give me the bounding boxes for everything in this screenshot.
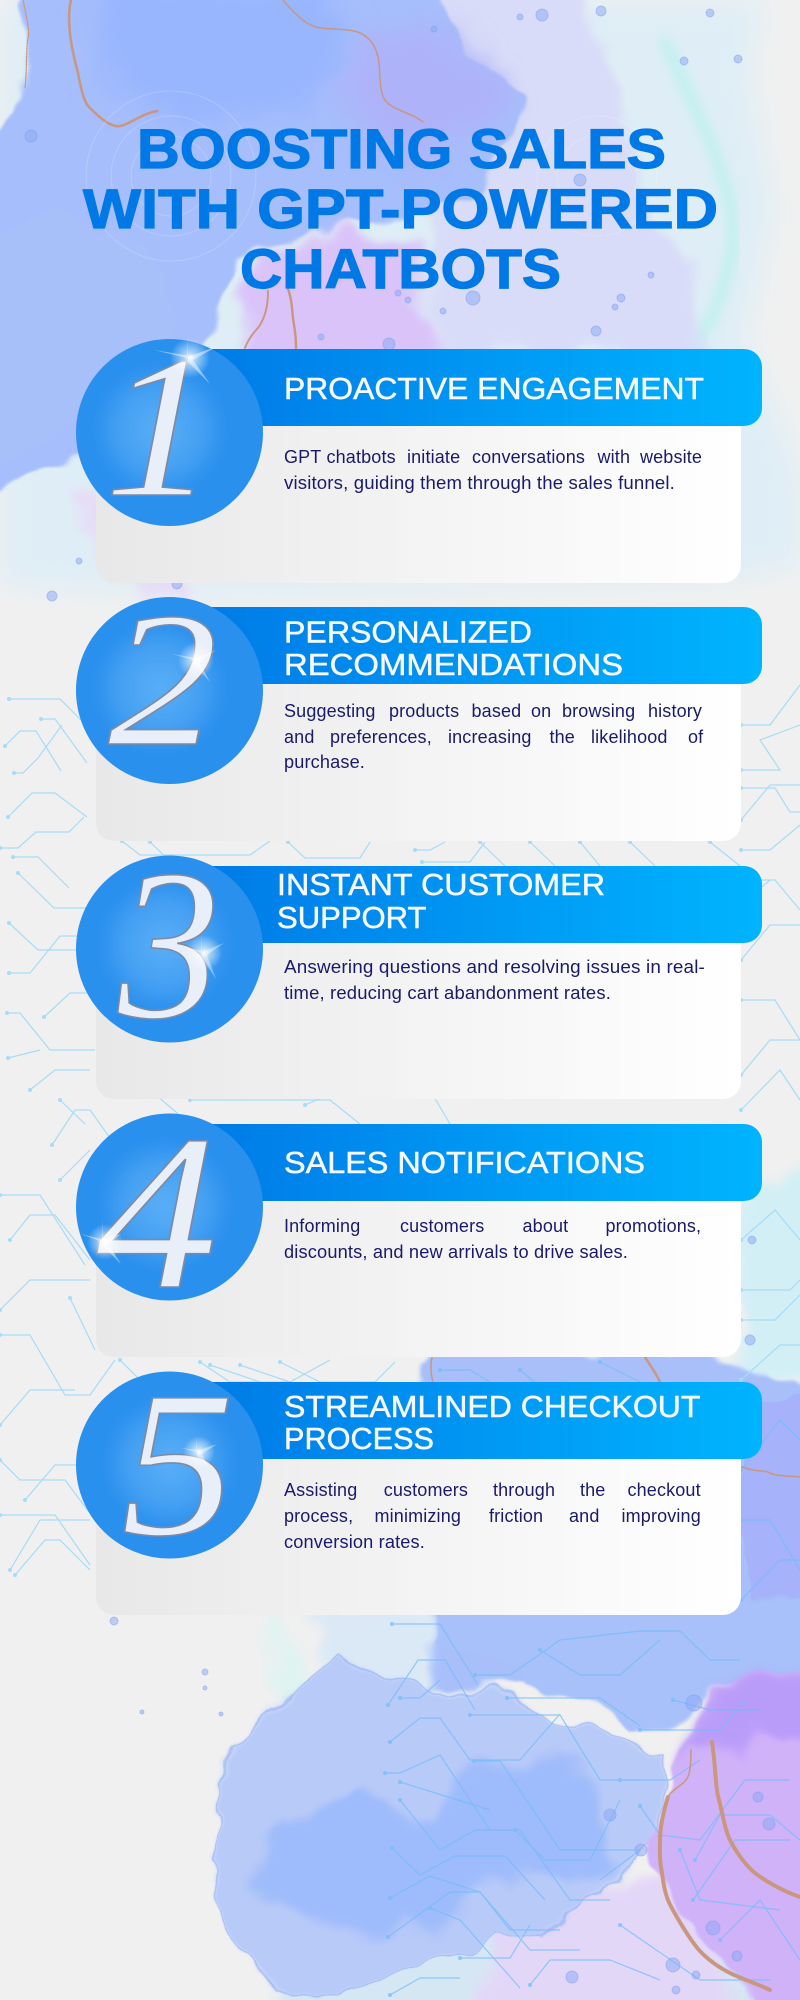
title: [83, 117, 718, 300]
heading 5: PROCESS: [284, 1421, 434, 1456]
body text 5: through: [493, 1480, 555, 1500]
header bar 2: [190, 607, 762, 684]
body text 1: chatbots: [326, 447, 396, 467]
header bar 3: [190, 866, 762, 943]
card body 2: [96, 658, 741, 841]
body text 4: customers: [400, 1216, 484, 1236]
body text 2: increasing: [448, 727, 532, 747]
number badge 5: 5: [121, 1349, 235, 1579]
card body 5: [96, 1432, 741, 1615]
number badge 2: [76, 573, 263, 786]
heading 1: PROACTIVE ENGAGEMENT: [284, 371, 704, 406]
body text 4: discounts, and new arrivals to drive sales.: [284, 1242, 628, 1262]
heading 5: STREAMLINED CHECKOUT: [284, 1389, 701, 1424]
body text 5: conversion rates.: [284, 1532, 425, 1552]
heading 2: [284, 614, 623, 682]
heading 2: PERSONALIZED: [284, 614, 532, 650]
body text 2: [284, 701, 704, 772]
circuit lines: [0, 685, 800, 1575]
panel: step 1 proactive engagement: [76, 314, 762, 583]
number badge 1: 1: [104, 314, 216, 539]
number badge 1: [76, 314, 263, 539]
body text 1: website: [639, 447, 702, 467]
body text 5: [284, 1480, 701, 1552]
card body 1: [96, 400, 741, 583]
body text 2: based: [472, 701, 521, 721]
title: CHATBOTS: [240, 237, 561, 300]
number badge 4: 4: [96, 1090, 218, 1336]
body text 2: products: [389, 701, 459, 721]
body text 5: customers: [384, 1480, 468, 1500]
number badge 3: [76, 825, 263, 1064]
lower right wash: [741, 1170, 800, 1380]
header bar 4: [190, 1124, 762, 1201]
card body 3: [96, 916, 741, 1099]
body text 5: checkout: [628, 1480, 701, 1500]
panel: step 4 sales notifications: [76, 1090, 762, 1357]
body text 5: improving: [622, 1506, 701, 1526]
body text 5: minimizing: [374, 1506, 461, 1526]
title: BOOSTING SALES: [137, 117, 666, 180]
body text 2: purchase.: [284, 752, 365, 772]
heading 4: SALES NOTIFICATIONS: [284, 1145, 645, 1180]
body text 2: likelihood: [591, 727, 668, 747]
body text 5: process,: [284, 1506, 353, 1526]
body text 4: Informing: [284, 1216, 360, 1236]
body text 2: preferences,: [330, 727, 432, 747]
body text 5: the: [580, 1480, 605, 1500]
bottom blobs: [300, 1600, 434, 1690]
number badge 5: [76, 1349, 263, 1579]
body text 1: [284, 447, 702, 493]
body text 2: of: [688, 727, 704, 747]
card body 4: [96, 1174, 741, 1357]
body text 1: GPT: [284, 447, 321, 467]
title: WITH GPT-POWERED: [83, 177, 718, 240]
body text 5: and: [569, 1506, 599, 1526]
body text 1: initiate: [407, 447, 460, 467]
body text 2: browsing: [562, 701, 635, 721]
body text 2: the: [550, 727, 575, 747]
heading 2: RECOMMENDATIONS: [284, 647, 623, 682]
body text 3: time, reducing cart abandonment rates.: [284, 983, 611, 1003]
body text 1: with: [596, 447, 630, 467]
number badge 4: [76, 1090, 263, 1336]
heading 3: INSTANT CUSTOMER: [277, 867, 605, 902]
number badge 3: 3: [117, 825, 220, 1064]
heading 3: [277, 867, 605, 935]
number badge 2: 2: [108, 573, 218, 786]
body text 3: Answering questions and resolving issues in real-: [284, 957, 705, 977]
body text 2: and: [284, 727, 314, 747]
header bar 1: [190, 349, 762, 426]
panel: step 3 instant customer support: [76, 825, 762, 1099]
body text 4: promotions,: [606, 1216, 701, 1236]
body text 5: friction: [489, 1506, 543, 1526]
panel: step 5 streamlined checkout process: [76, 1349, 762, 1615]
header bar 5: [190, 1382, 762, 1459]
body text 4: about: [522, 1216, 568, 1236]
heading 3: SUPPORT: [277, 900, 427, 935]
body text 1: visitors, guiding them through the sales funnel.: [284, 473, 675, 493]
body text 2: Suggesting: [284, 701, 376, 721]
panel: step 2 personalized recommendations: [76, 573, 762, 841]
body text 2: on: [531, 701, 551, 721]
body text 4: [284, 1216, 701, 1262]
body text 2: history: [648, 701, 702, 721]
heading 5: [284, 1389, 701, 1456]
body text 1: conversations: [472, 447, 585, 467]
body text 5: Assisting: [284, 1480, 357, 1500]
body text 3: [284, 957, 705, 1003]
